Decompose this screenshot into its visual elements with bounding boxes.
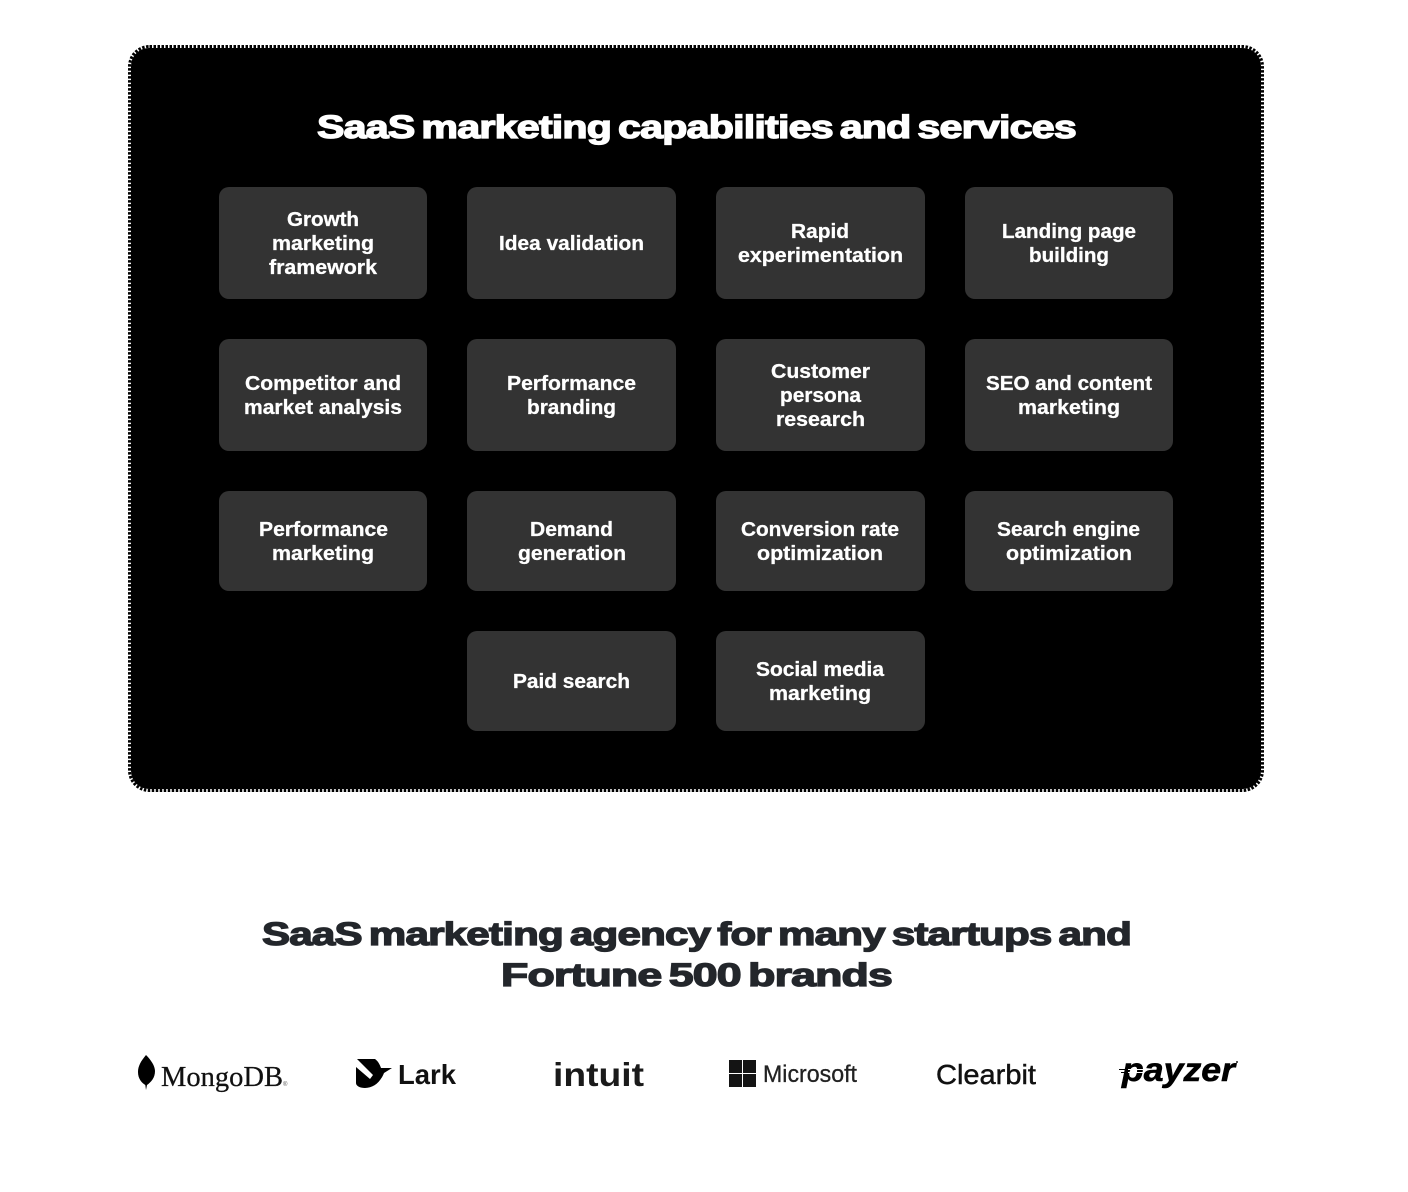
card: landing page building: building	[1029, 245, 1109, 267]
logo: Microsoft: Microsoft	[763, 1061, 857, 1088]
card: customer persona research	[716, 339, 925, 451]
card: idea validation	[467, 187, 676, 299]
logo: Microsoft	[729, 1060, 857, 1088]
logo: MongoDB: MongoDB	[161, 1062, 283, 1093]
logo: Clearbit: Clearbit	[936, 1059, 1036, 1090]
card: rapid experimentation	[716, 187, 925, 299]
card: paid search	[467, 631, 676, 731]
card: search engine optimization	[965, 491, 1173, 591]
card: growth marketing framework: framework	[269, 257, 378, 279]
card: growth marketing framework	[219, 187, 427, 299]
card: growth marketing framework: Growth	[287, 209, 359, 231]
card: customer persona research: persona	[780, 385, 862, 407]
logo: Intuit: intuit	[553, 1056, 644, 1093]
card: seo and content marketing: SEO and content	[986, 373, 1152, 395]
card: landing page building: Landing page	[1002, 221, 1136, 243]
card: competitor and market analysis: Competitor and	[245, 373, 401, 395]
card: seo and content marketing: marketing	[1018, 397, 1120, 419]
card: search engine optimization: Search engine	[997, 519, 1140, 541]
card: social media marketing: marketing	[769, 683, 871, 705]
card: search engine optimization: optimization	[1006, 543, 1132, 565]
card: performance marketing	[219, 491, 427, 591]
card: performance branding: branding	[527, 397, 616, 419]
logo: Lark	[356, 1059, 456, 1090]
logo: Lark: Lark	[398, 1059, 456, 1090]
card: landing page building	[965, 187, 1173, 299]
card: rapid experimentation: experimentation	[738, 245, 903, 267]
heading: agency for startups and brands: Fortune 500 brands	[501, 957, 892, 993]
heading: agency for startups and brands	[262, 916, 1131, 993]
card: social media marketing	[716, 631, 925, 731]
logo: MongoDB	[138, 1055, 288, 1093]
card: competitor and market analysis: market analysis	[244, 397, 402, 419]
card: conversion rate optimization	[716, 491, 925, 591]
card: customer persona research: research	[776, 409, 865, 431]
panel: capabilities and services	[130, 46, 1262, 790]
card: paid search: Paid search	[513, 671, 630, 693]
card: idea validation: Idea validation	[499, 233, 644, 255]
card: social media marketing: Social media	[756, 659, 885, 681]
card: demand generation	[467, 491, 676, 591]
heading: agency for startups and brands: SaaS marketing agency for many startups and	[262, 916, 1131, 952]
card: growth marketing framework: marketing	[272, 233, 374, 255]
card: seo and content marketing	[965, 339, 1173, 451]
logo: payzer: payzer	[1121, 1051, 1237, 1088]
card: competitor and market analysis	[219, 339, 427, 451]
heading: capabilities: SaaS marketing capabilities and services	[317, 109, 1076, 145]
card: demand generation: Demand	[530, 519, 613, 541]
card: performance branding	[467, 339, 676, 451]
card: performance marketing: Performance	[259, 519, 388, 541]
card: conversion rate optimization: optimization	[757, 543, 883, 565]
logo: MongoDB: ®	[283, 1081, 288, 1088]
card: performance marketing: marketing	[272, 543, 374, 565]
card: performance branding: Performance	[507, 373, 636, 395]
card: rapid experimentation: Rapid	[791, 221, 849, 243]
card: customer persona research: Customer	[771, 361, 870, 383]
card: conversion rate optimization: Conversion rate	[741, 519, 899, 541]
card: demand generation: generation	[518, 543, 626, 565]
